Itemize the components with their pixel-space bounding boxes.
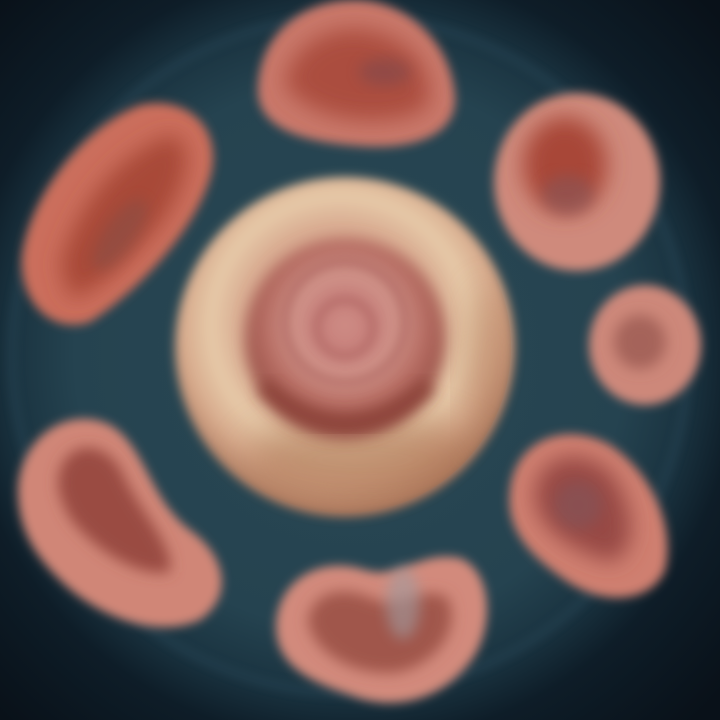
organelle: top	[258, 0, 455, 147]
organelle: right	[589, 285, 701, 405]
organelle: upper right	[494, 93, 660, 271]
organelle: bottom	[276, 557, 487, 703]
organelle: lower right	[509, 434, 668, 598]
organelle: lower left	[18, 419, 222, 627]
organelle: upper left	[22, 103, 213, 325]
central nucleus	[175, 177, 515, 517]
